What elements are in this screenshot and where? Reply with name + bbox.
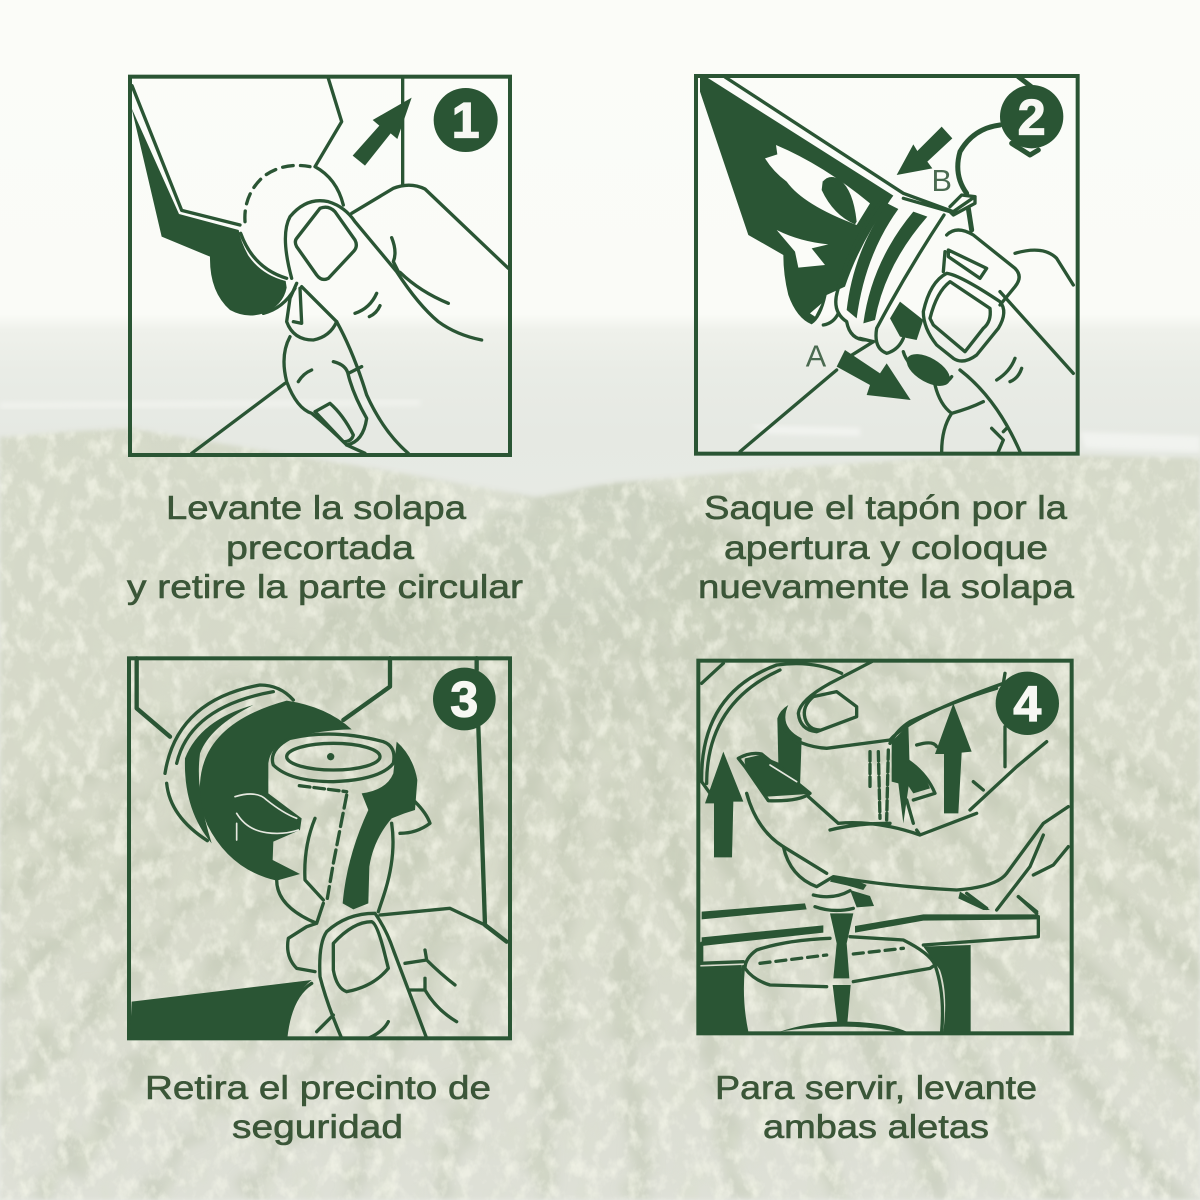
text: step 2 caption bbox=[698, 489, 1075, 605]
text: step 1 caption bbox=[127, 489, 523, 605]
cap and fingers bbox=[738, 662, 1005, 823]
badge 2 bbox=[1000, 85, 1063, 148]
badge 2: 2 bbox=[1018, 89, 1046, 145]
dark bottle body bbox=[132, 108, 287, 316]
dark bottle mouth bbox=[199, 701, 352, 881]
text: step 4 caption: Para servir, levante bbox=[715, 1069, 1037, 1106]
pouring spout bbox=[902, 348, 955, 392]
panel: step 3 illustration bbox=[129, 658, 510, 1038]
badge 1: 1 bbox=[452, 93, 480, 149]
text: step 4 caption bbox=[715, 1069, 1037, 1145]
label A: A bbox=[806, 340, 827, 374]
badge 4: 4 bbox=[1013, 676, 1041, 732]
cap bbox=[272, 734, 394, 900]
frame bbox=[696, 76, 1078, 454]
badge 3 bbox=[433, 668, 496, 730]
text: step 1 caption: y retire la parte circular bbox=[127, 568, 523, 605]
text: step 3 caption bbox=[145, 1069, 491, 1145]
pull tab outline bbox=[235, 794, 298, 840]
text: step 4 caption: ambas aletas bbox=[763, 1108, 989, 1145]
table edge dark bbox=[130, 980, 312, 1038]
dashed circular flap bbox=[245, 165, 310, 222]
badge 4 bbox=[996, 672, 1059, 735]
panel: step 1 illustration bbox=[130, 77, 510, 455]
neck ring lines bbox=[165, 685, 293, 841]
spout bbox=[813, 890, 874, 910]
arrow B bbox=[897, 127, 952, 175]
arrow up right bbox=[353, 98, 412, 166]
flap and carton lines bbox=[192, 78, 403, 453]
hand bbox=[277, 880, 485, 1038]
right dark strap bbox=[343, 742, 417, 909]
label B: B bbox=[931, 164, 952, 198]
text: step 2 caption: apertura y coloque bbox=[724, 529, 1048, 566]
panel: step 4 illustration bbox=[698, 661, 1072, 1033]
text: step 3 caption: seguridad bbox=[232, 1108, 403, 1145]
cap and thumb bbox=[890, 230, 1073, 361]
bottle rings bbox=[823, 197, 944, 353]
dark bottle body bbox=[700, 77, 893, 324]
glass rim bbox=[742, 937, 942, 1032]
hand: thumb and finger bbox=[263, 185, 508, 453]
carton edge bbox=[725, 77, 975, 215]
badge 3: 3 bbox=[450, 672, 478, 728]
text: step 3 caption: Retira el precinto de bbox=[145, 1069, 491, 1106]
lower fingers bbox=[935, 358, 1022, 452]
frame bbox=[129, 658, 510, 1038]
badge 1 bbox=[434, 88, 498, 152]
oil stream bbox=[780, 913, 907, 1032]
carton lines bbox=[137, 658, 507, 942]
strap side lines bbox=[378, 802, 430, 912]
bottle highlights bbox=[765, 145, 870, 317]
background: olive grove landscape bbox=[0, 325, 1200, 1200]
curl and top lines bbox=[958, 77, 1038, 230]
frame bbox=[698, 661, 1072, 1033]
carton lower lines bbox=[740, 292, 1073, 452]
frame bbox=[130, 77, 510, 455]
text: step 2 caption: Saque el tapón por la bbox=[704, 489, 1068, 526]
hand lower bbox=[747, 727, 1068, 912]
text: step 2 caption: nuevamente la solapa bbox=[698, 568, 1075, 605]
table bbox=[700, 897, 1038, 963]
bottle neck arc bbox=[702, 663, 842, 793]
text: step 1 caption: precortada bbox=[226, 529, 415, 566]
arrows up bbox=[705, 703, 972, 857]
arrow A bbox=[837, 350, 911, 400]
text: step 1 caption: Levante la solapa bbox=[166, 489, 467, 526]
dark posts bbox=[700, 945, 971, 1033]
carton edge line bbox=[132, 86, 240, 225]
panel: step 2 illustration bbox=[696, 76, 1078, 454]
